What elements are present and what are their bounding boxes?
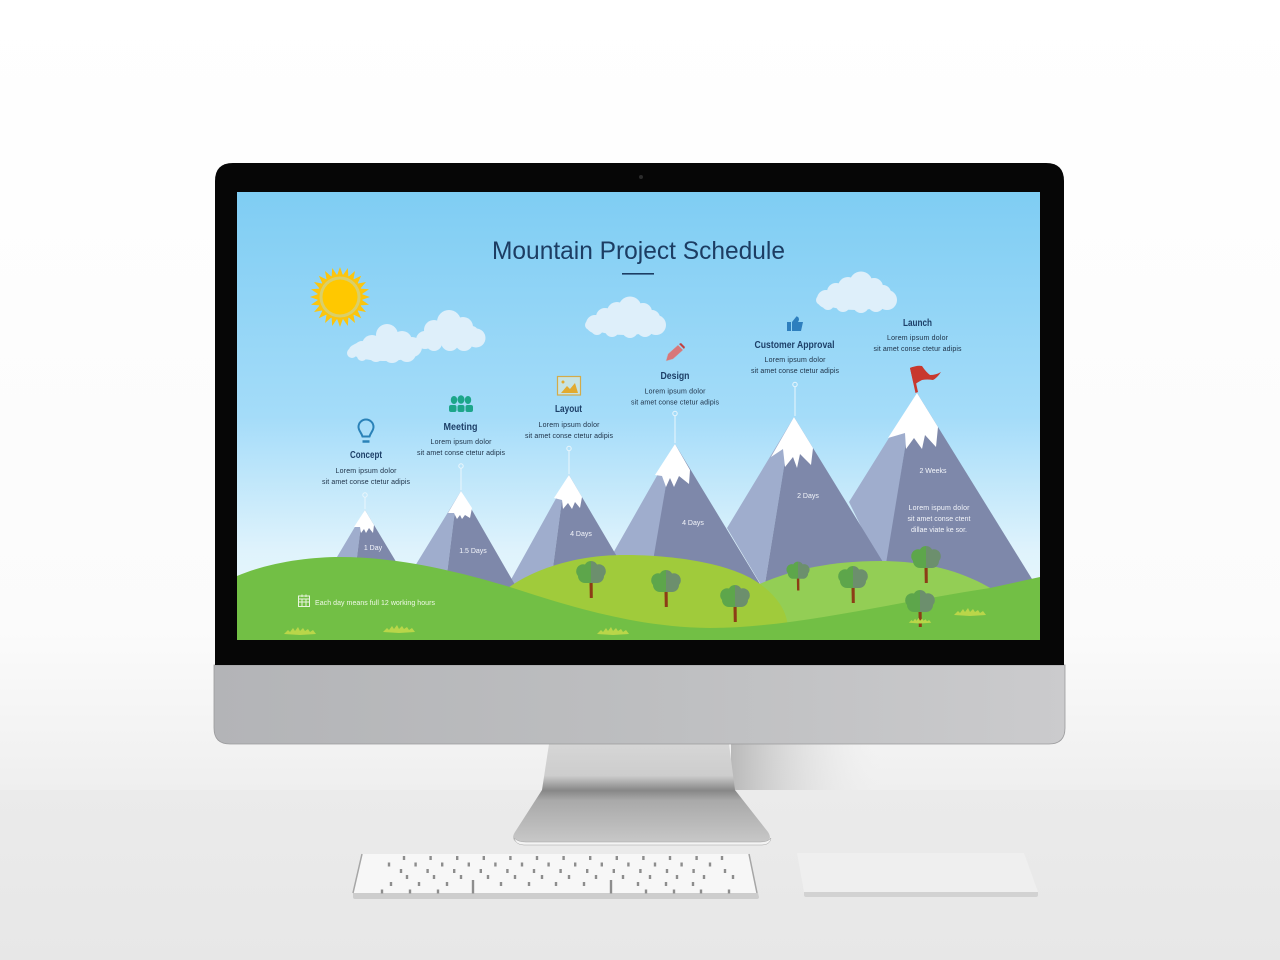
screen: mountain schedule slide [237, 192, 1040, 640]
day labels: 2 Days [797, 493, 819, 500]
red flag [910, 366, 941, 393]
step 5: customer approval: sit amet conse ctetur adipis [751, 368, 840, 375]
calendar note: Each day means full 12 working hours [315, 600, 436, 607]
title underline [622, 273, 654, 275]
monitor stand [513, 744, 771, 845]
hill: light green right [755, 561, 992, 625]
hill: yellow green centre [508, 555, 788, 630]
keyboard [353, 854, 759, 899]
camera [639, 175, 643, 179]
step 4: design: sit amet conse ctetur adipis [631, 400, 720, 406]
step 2: meeting: Meeting [444, 421, 478, 433]
launch mountain note: Lorem ispum dolor [908, 505, 970, 512]
launch mountain note: sit amet conse ctent [908, 516, 971, 523]
icon: pencil [666, 343, 685, 361]
stand wall shadow [731, 744, 881, 790]
hill: front green [237, 557, 1040, 640]
mountain 6: launch [849, 393, 1032, 600]
trackpad [797, 853, 1038, 897]
mountain 4: design [612, 444, 760, 590]
day labels: 2 Weeks [919, 468, 947, 475]
step 3: layout: Lorem ipsum dolor [538, 422, 600, 429]
trees [576, 546, 941, 627]
desk surface [0, 790, 1280, 960]
icon: people [449, 395, 473, 412]
calendar note [298, 594, 436, 607]
monitor [214, 163, 1065, 744]
icon: thumbs up [787, 316, 803, 331]
step 5: customer approval: Customer Approval [754, 339, 835, 351]
step 1: concept [322, 420, 410, 486]
title: Mountain Project Schedule [492, 237, 785, 265]
day labels [364, 468, 947, 555]
day labels: 1 Day [364, 545, 383, 552]
step 1: concept: Lorem ipsum dolor [336, 468, 397, 475]
launch mountain note [908, 505, 971, 534]
step 5: customer approval: Lorem ipsum dolor [764, 357, 826, 364]
launch mountain note: dillae viate ke sor. [911, 527, 967, 534]
cloud: left double [347, 310, 486, 363]
step 2: meeting [417, 395, 506, 457]
step 2: meeting: Lorem ipsum dolor [430, 439, 492, 446]
step 3: layout: sit amet conse ctetur adipis [525, 433, 614, 440]
mountain 1: concept [334, 510, 398, 565]
icon: picture [558, 376, 580, 395]
key gaps [382, 856, 733, 894]
step 3: layout: Layout [555, 403, 582, 415]
step 4: design: Lorem ipsum dolor [644, 388, 706, 396]
sun [310, 267, 370, 327]
cloud: centre [585, 296, 666, 338]
step 6: launch: Launch [903, 317, 932, 329]
monitor chin [214, 665, 1065, 744]
step 3: layout [525, 376, 614, 440]
mountain 3: layout [508, 475, 622, 590]
day labels: 4 Days [682, 520, 704, 527]
grass tufts [284, 608, 986, 635]
step 1: concept: sit amet conse ctetur adipis [322, 479, 410, 486]
step 5: customer approval [751, 316, 840, 375]
step 1: concept: Concept [350, 449, 382, 461]
mountain 2: meeting [415, 491, 518, 590]
mountain 5: customer approval [727, 417, 886, 590]
step 6: launch [874, 317, 962, 353]
step 6: launch: sit amet conse ctetur adipis [874, 346, 962, 353]
cloud: right [816, 272, 897, 313]
sky [237, 192, 1040, 640]
icon: light bulb [358, 420, 374, 442]
pin lines [363, 382, 797, 509]
step 4: design [631, 343, 720, 406]
step 6: launch: Lorem ipsum dolor [887, 335, 949, 342]
day labels: 1.5 Days [459, 548, 487, 555]
step 2: meeting: sit amet conse ctetur adipis [417, 450, 506, 457]
monitor bezel [215, 163, 1064, 665]
step 4: design: Design [660, 370, 690, 382]
day labels: 4 Days [570, 531, 592, 538]
